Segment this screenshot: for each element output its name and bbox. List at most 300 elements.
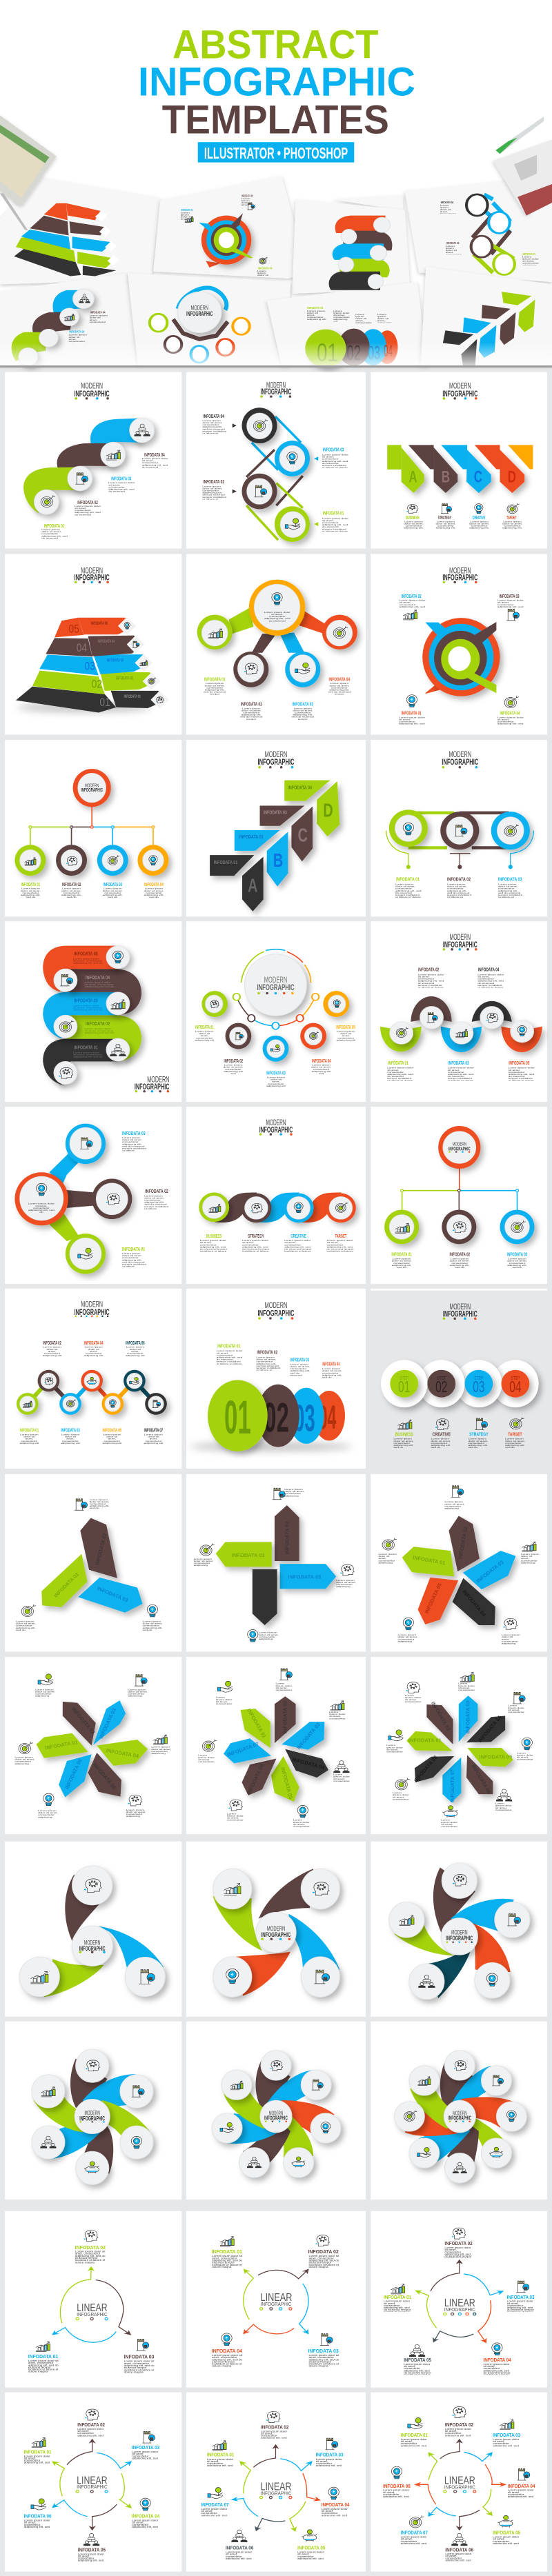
icon notes: Lorem ipsum dolor sit amet, consectetur (198, 1754, 215, 1763)
captions: INFODATA 01 (195, 1025, 214, 1030)
circles with icons (32, 2049, 153, 2184)
captions: Lorem ipsum dolor sit amet, consectetur adipiscing elit, sed do (392, 1258, 412, 1269)
infodata 07 (401, 2515, 428, 2544)
title (138, 22, 415, 142)
rows 7 and 8 (5, 1474, 547, 1834)
chain links (28, 1381, 156, 1404)
arrows: INFODATA 05 (424, 1582, 443, 1615)
infodata 01: INFODATA 01 (401, 2433, 428, 2438)
target note: Lorem ipsum dolor sit amet, consectetur adipiscing (378, 1553, 397, 1564)
mini circle tree: INFOGRAPHIC (186, 311, 213, 317)
arrows and blocks (210, 781, 339, 912)
panel: seven node chain: INFODATA 07 (144, 1427, 163, 1433)
centre label: LINEAR (77, 2302, 108, 2314)
infodata 01 (122, 1247, 147, 1268)
captions with icons (393, 1417, 526, 1451)
infodata 05: INFODATA 05 (493, 2530, 521, 2536)
pill circles with icons (54, 946, 130, 1084)
arrows and blocks: A (248, 875, 257, 896)
block captions: INFODATA 02 (239, 834, 264, 840)
leader lines (386, 831, 533, 869)
bulb note (398, 1618, 418, 1645)
panel: swirl seven (186, 2022, 366, 2200)
layer numbers: 04 (77, 642, 87, 654)
captions: CREATIVE (290, 1234, 306, 1239)
centre label: LINEAR (444, 2297, 475, 2309)
infodata 03: INFODATA 03 (448, 1060, 469, 1066)
mini sheet captions: INFODATA 01 (181, 209, 193, 212)
strategy (435, 504, 457, 530)
infodata 04 (142, 452, 168, 469)
infodata 02 (444, 2228, 473, 2258)
rows 11 and 12 (5, 2211, 547, 2572)
panel: curl steps: INFOGRAPHIC (75, 389, 110, 399)
infodata 06 (24, 2499, 53, 2528)
panel: concentric target (371, 554, 547, 735)
discs (208, 1380, 345, 1451)
captions (195, 1025, 355, 1087)
infodata 01: Lorem ipsum dolor sit amet, consectetur adipiscing elit, sed do eiusmod tempor incididunt ut labore et dolore (217, 1350, 243, 1365)
ribbons: B (442, 467, 450, 486)
icon notes: Lorem ipsum dolor sit amet, consectetur adipiscing (128, 1689, 148, 1697)
arrows: INFODATA 06 (63, 1758, 83, 1790)
panel: linear five (371, 2211, 547, 2388)
infodata 05: INFODATA 05 (78, 2547, 106, 2553)
arrows (402, 1516, 515, 1625)
arrows: INFODATA 02 (70, 1706, 97, 1735)
panel: pyramid: INFODATA 01 (124, 694, 141, 699)
arrows: INFODATA 01 (232, 1552, 265, 1558)
pills (43, 946, 141, 1085)
mini sheet captions: INFODATA 03 (241, 194, 253, 198)
infodata 07: INFODATA 07 (201, 2502, 229, 2508)
infodata 02: INFODATA 02 (445, 2422, 473, 2428)
arrows: INFODATA 01 (52, 1571, 80, 1599)
pill captions (73, 951, 114, 1058)
infodata 01 (401, 2418, 428, 2446)
layer numbers: 01 (99, 696, 110, 709)
panel: four arrows (186, 1474, 366, 1652)
infodata 05: INFODATA 05 (297, 2545, 326, 2551)
panel: diagonal arrows: INFOGRAPHIC (257, 758, 295, 767)
circles with icons: INFOGRAPHIC (262, 1931, 291, 1938)
panel: circle with drops: INFODATA 05 (336, 1025, 355, 1030)
step discs: 03 (473, 1378, 485, 1396)
pill captions: INFODATA 02 (86, 1021, 110, 1027)
infodata 01: INFODATA 01 (384, 2295, 411, 2301)
infodata 07 (201, 2487, 230, 2516)
top node: INFOGRAPHIC (448, 1146, 471, 1152)
bottom captions: INFODATA 03 (61, 1427, 80, 1433)
infodata 02: Lorem ipsum dolor sit amet, consectetur adipiscing elit, sed do eiusmod tempor incididunt ut labore et dolore magna (308, 2255, 339, 2268)
infodata 01: INFODATA 01 (388, 1060, 408, 1066)
infodata 02 (202, 479, 228, 500)
panel: swirl eight (371, 2022, 547, 2200)
arrows: INFODATA 01 (246, 1707, 268, 1739)
centre label: LINEAR (77, 2475, 108, 2487)
panel: linked rings: MODERN (266, 381, 286, 390)
pill captions: INFODATA 04 (86, 975, 110, 980)
diamond tags (118, 617, 169, 709)
circles with icons (213, 1869, 339, 1997)
mini sheet captions: INFODATA 02 (446, 242, 460, 245)
central circle (241, 949, 311, 1016)
layer captions (91, 621, 141, 699)
captions: Lorem ipsum dolor sit amet, consectetur adipiscing elit, sed do (144, 887, 164, 898)
bottom captions (19, 1427, 164, 1445)
captions: Lorem ipsum dolor sit amet, consectetur adipiscing elit, sed do eiusmod tempor incididunt ut labore (326, 1240, 354, 1252)
heading (257, 750, 295, 768)
panel: three arrows (5, 1474, 181, 1652)
infodata 01: Lorem ipsum dolor sit amet, consectetur adipiscing elit, sed do eiusmod tempor incididunt ut labore et dolore magna (28, 2360, 59, 2373)
infodata 01: INFODATA 01 (212, 2249, 242, 2255)
discs: 03 (294, 1397, 315, 1439)
infodata 03 (108, 476, 135, 492)
infodata 03: INFODATA 03 (308, 2348, 339, 2355)
infodata 02: INFODATA 02 (418, 967, 439, 973)
captions with icons: STRATEGY (469, 1431, 489, 1438)
infodata 03: INFODATA 03 (124, 2354, 154, 2360)
infodata 02: INFODATA 02 (308, 2249, 339, 2255)
step discs: 02 (435, 1378, 447, 1396)
mockup sheets (0, 176, 552, 365)
heading (442, 566, 477, 583)
arrows (233, 2445, 319, 2531)
mini circle tree (150, 288, 250, 363)
panel: hub with four nodes (186, 554, 366, 735)
circles with icons: INFOGRAPHIC (79, 2115, 105, 2122)
captions: Lorem ipsum dolor sit amet, consectetur adipiscing elit, sed do eiusmod tempor incididunt ut labore (200, 1240, 227, 1252)
infodata 08: INFODATA 08 (383, 2483, 411, 2489)
captions: Lorem ipsum dolor sit amet, consectetur adipiscing elit sed (311, 1064, 331, 1075)
drops (201, 991, 349, 1062)
badge: illustrator photoshop (198, 142, 354, 163)
arrows (41, 1518, 143, 1613)
infodata 02 (240, 701, 263, 721)
infodata 07: INFODATA 07 (401, 2530, 428, 2536)
infodata 05 (404, 2344, 433, 2375)
mini sheet captions: INFODATA 04 (258, 267, 273, 270)
arrows: INFODATA 02 (430, 1700, 452, 1732)
mini sheet captions (68, 194, 540, 343)
panel: steps on grey (371, 1289, 547, 1451)
captions: TARGET (335, 1234, 346, 1239)
mini discs: 02 (347, 342, 361, 365)
infodata 06 (126, 1340, 145, 1357)
connectors (229, 607, 326, 653)
mini sheet captions: INFODATA 01 (307, 307, 324, 310)
infodata 01 (399, 695, 426, 725)
infodata 01 (28, 2342, 60, 2373)
infodata 01: INFODATA 01 (217, 1343, 241, 1349)
panel: numbered discs (186, 1289, 366, 1469)
tree arc (233, 994, 319, 1029)
captions: Lorem ipsum dolor sit amet, consectetur adipiscing elit, sed do (507, 1258, 527, 1269)
icon notes: Lorem ipsum dolor sit amet, consectetur (517, 1752, 533, 1760)
arrows (216, 1505, 336, 1625)
panel: ribbons abcd (371, 372, 547, 549)
heading: MODERN (449, 750, 471, 759)
panel: pyramid: INFOGRAPHIC (75, 573, 110, 583)
panel: org chart four: INFODATA 04 (144, 882, 164, 888)
swirl bands (44, 1875, 164, 1997)
panel: twisted chain: MODERN (266, 1118, 286, 1127)
rows 1 and 2 (5, 372, 547, 735)
panel: seven node chain: INFOGRAPHIC (75, 1308, 110, 1317)
infodata 04 (484, 2343, 512, 2375)
bottom fade (0, 343, 552, 365)
arrows (416, 2260, 503, 2342)
icon notes: Lorem ipsum dolor sit amet, consectetur (458, 1682, 475, 1691)
circles with icons: MODERN (84, 2110, 100, 2117)
captions (390, 1251, 529, 1269)
captions: INFODATA 02 (62, 882, 81, 888)
infodata 01: INFODATA 01 (122, 1247, 146, 1252)
captions with icons: Lorem ipsum dolor sit amet, consectetur adipiscing elit sed do (393, 1438, 413, 1449)
arrows: INFODATA 04 (461, 1589, 487, 1618)
icon notes: Lorem ipsum dolor sit amet, consectetur (216, 1696, 232, 1705)
captions: INFODATA 02 (450, 1251, 470, 1258)
panel: snake pills (5, 921, 181, 1102)
infodata 02 (445, 2406, 474, 2436)
panel: snake pills: INFOGRAPHIC (135, 1083, 169, 1091)
infodata 03: INFODATA 03 (316, 2452, 343, 2458)
infodata 01: INFODATA 01 (24, 2449, 52, 2455)
infodata 03: INFODATA 03 (323, 447, 344, 453)
centre label: INFOGRAPHIC (444, 2307, 475, 2313)
panel: swirl six (5, 2022, 181, 2200)
infodata 01: INFODATA 01 (323, 510, 344, 516)
panel: numbered discs: INFODATA 02 (257, 1349, 277, 1356)
panel: linear eight (371, 2393, 547, 2572)
panel: diagonal arrows: INFODATA 04 (288, 785, 312, 791)
heading (257, 1301, 295, 1320)
icon notes (14, 1674, 171, 1821)
panel: seven node chain: INFODATA 02 (43, 1340, 61, 1346)
arrows: INFODATA 01 (45, 1739, 78, 1751)
step discs: 04 (509, 1378, 522, 1396)
panel: circle with drops (186, 921, 366, 1102)
arrows (406, 1695, 513, 1802)
arrows: INFODATA 02 (284, 1521, 290, 1554)
infodata 02 (261, 2411, 289, 2439)
panel: wave arches (371, 921, 547, 1102)
mini arrows (443, 292, 535, 365)
panel: wave arches: INFOGRAPHIC (443, 940, 477, 949)
panel: ribbons abcd: CREATIVE (473, 515, 485, 521)
icon notes: Lorem ipsum dolor sit amet, consectetur (293, 1819, 310, 1828)
captions with icons: TARGET (508, 1431, 522, 1438)
arrows (37, 1700, 148, 1798)
infodata 02: INFODATA 02 (203, 479, 224, 485)
centre label (76, 2475, 108, 2493)
arrows: INFODATA 03 (98, 1707, 117, 1740)
arrows: INFODATA 06 (471, 1763, 492, 1795)
panel: hub with four nodes: INFODATA 01 (204, 676, 226, 683)
infodata 04: INFODATA 04 (212, 2348, 242, 2355)
pill captions: INFODATA 03 (74, 998, 98, 1004)
captions with icons: Lorem ipsum dolor sit amet, consectetur adipiscing elit sed do (505, 1438, 525, 1449)
centre label: INFOGRAPHIC (77, 2311, 108, 2317)
infodata 03: INFODATA 03 (122, 1130, 146, 1136)
discs: 01 (224, 1391, 251, 1444)
infodata 01 (41, 523, 68, 539)
infodata 01 (24, 2437, 53, 2464)
swirl bands (33, 2059, 150, 2174)
panel: linked rings: INFOGRAPHIC (261, 388, 291, 396)
icon notes (198, 1669, 352, 1829)
icon notes: Lorem ipsum dolor sit amet, consectetur (441, 1819, 457, 1828)
tree lines (29, 807, 155, 845)
circles with icons: MODERN (267, 1924, 285, 1932)
infodata 04 (477, 967, 504, 988)
central circle: MODERN (264, 976, 287, 985)
bottom captions: INFODATA 05 (102, 1427, 121, 1433)
heading (443, 933, 477, 951)
infodata 04 (202, 413, 228, 434)
heading: MODERN (449, 566, 471, 576)
discs: 02 (264, 1394, 289, 1441)
circles with icons: MODERN (84, 1939, 100, 1946)
circles with icons: MODERN (451, 1930, 468, 1936)
arrows: INFODATA 04 (477, 1714, 503, 1744)
panel: belt rings (371, 740, 547, 916)
panel: swirl five (371, 1842, 547, 2017)
centre label: INFOGRAPHIC (77, 2484, 108, 2490)
bulb note (143, 1604, 166, 1633)
centre label: LINEAR (261, 2291, 292, 2304)
infodata 03 (122, 1130, 147, 1152)
infodata 03 (308, 2334, 339, 2367)
infodata 03: Lorem ipsum dolor sit amet, consectetur adipiscing elit, sed do eiusmod tempor incididunt ut labore (122, 1137, 146, 1151)
captions: INFODATA 04 (312, 1058, 331, 1064)
panel: swirl three (5, 1842, 181, 2017)
infodata 04: INFODATA 04 (203, 413, 224, 419)
infodata 05: INFODATA 05 (404, 2357, 431, 2363)
circles with icons (394, 2051, 526, 2183)
panel: numbered discs: INFODATA 03 (290, 1357, 309, 1363)
target note: Lorem ipsum dolor sit amet, consectetur adipiscing (194, 1558, 213, 1567)
bulb note: Lorem ipsum dolor sit amet, consectetur adipiscing elit, sed do (143, 1620, 162, 1631)
rings with icons (242, 407, 310, 542)
hub (249, 580, 305, 636)
icon notes: Lorem ipsum dolor sit amet, consectetur adipiscing (151, 1746, 171, 1755)
panel: belt rings: INFOGRAPHIC (442, 758, 478, 767)
ribbons (387, 445, 533, 493)
infodata 01: Lorem ipsum dolor sit amet, consectetur adipiscing elit, sed do eiusmod tempor incididunt ut labore (122, 1253, 146, 1267)
pill captions: INFODATA 05 (74, 951, 98, 957)
centre label (260, 2481, 292, 2499)
panel: concentric target: INFODATA 04 (500, 710, 520, 716)
block captions: INFODATA 01 (214, 860, 238, 865)
icon notes: Lorem ipsum dolor sit amet, consectetur (333, 1773, 350, 1782)
infodata 04: INFODATA 04 (478, 967, 500, 973)
panel: seven arrows (186, 1657, 366, 1834)
panel: curl steps: INFODATA 03 (111, 476, 131, 482)
captions: Lorem ipsum dolor sit amet, consectetur adipiscing elit, sed do eiusmod tempor incididunt ut labore (242, 1240, 269, 1252)
top node (73, 769, 111, 807)
heading (260, 381, 291, 398)
infodata 01: Lorem ipsum dolor sit amet, consectetur adipiscing elit, sed do eiusmod tempor incididunt ut labore et dolore magna (212, 2255, 242, 2268)
bulb note (248, 1629, 279, 1643)
mini chain of rings (466, 194, 515, 275)
arrows and blocks: B (273, 849, 283, 871)
arrows: INFODATA 03 (288, 1573, 321, 1580)
infodata 06: INFODATA 06 (445, 2547, 473, 2553)
centre label: INFOGRAPHIC (261, 2491, 291, 2497)
arrows: INFODATA 03 (475, 1559, 505, 1584)
panel: wave arches: MODERN (450, 933, 471, 942)
panel: linked rings (186, 372, 366, 549)
infodata 01 (384, 2284, 413, 2312)
panel: six arrows (5, 1657, 181, 1834)
centre label (260, 2291, 292, 2310)
mini curl steps (12, 289, 94, 365)
panel: metaball tree (5, 1107, 181, 1284)
ribbons: A (408, 467, 417, 486)
captions: INFODATA 02 (224, 1058, 243, 1064)
infodata 05 (297, 2530, 326, 2559)
arrows: INFODATA 06 (246, 1763, 265, 1795)
infodata 06: INFODATA 06 (24, 2513, 51, 2519)
circles with icons: INFOGRAPHIC (264, 2115, 288, 2122)
arches (380, 996, 542, 1052)
heading: MODERN (81, 381, 103, 391)
swirl bands (213, 1869, 339, 1996)
tower note: Lorem ipsum dolor sit amet, consectetur adipiscing elit, sed do (90, 1498, 109, 1509)
infodata 04 (497, 696, 524, 725)
infodata 01 (395, 876, 422, 898)
infodata 03 (316, 2438, 344, 2466)
infodata 03 (507, 2281, 536, 2312)
mini sheet captions: Lorem ipsum dolor sit amet, consectetur adipiscing elit (307, 310, 326, 321)
layer captions: INFODATA 03 (107, 658, 124, 663)
rings (389, 809, 530, 849)
link bands (246, 416, 303, 540)
arrows: INFODATA 04 (292, 1756, 326, 1771)
infodata 04: Lorem ipsum dolor sit amet, consectetur adipiscing elit, sed do eiusmod tempor (328, 683, 351, 695)
panel: ribbons abcd: STRATEGY (438, 515, 451, 521)
mini discs: 03 (368, 343, 380, 363)
captions: Lorem ipsum dolor sit amet, consectetur adipiscing elit, sed do (21, 887, 41, 898)
infodata 04: INFODATA 04 (132, 2513, 160, 2519)
layer captions: INFODATA 05 (91, 621, 108, 626)
panel: hub with four nodes: INFODATA 03 (292, 701, 313, 707)
icon notes (386, 1672, 535, 1829)
arrows: INFODATA 03 (295, 1722, 322, 1751)
arrows: INFODATA 04 (262, 1576, 268, 1609)
icon notes: Lorem ipsum dolor sit amet, consectetur (275, 1682, 292, 1691)
captions: Lorem ipsum dolor sit amet, consectetur adipiscing elit, sed do (61, 887, 81, 898)
infodata 02 (144, 1188, 169, 1210)
panel: diagonal arrows (186, 740, 366, 916)
centre label: LINEAR (444, 2475, 475, 2487)
infodata 02 (75, 2231, 107, 2264)
title: ABSTRACT (172, 22, 378, 67)
heading (75, 1300, 110, 1317)
heading (75, 381, 110, 400)
infodata 04 (212, 2333, 243, 2367)
icon notes: Lorem ipsum dolor sit amet, consectetur adipiscing (14, 1756, 34, 1764)
panel: hub with four nodes: INFODATA 02 (241, 701, 262, 707)
infodata 03 (448, 1060, 474, 1081)
hero banner (0, 0, 552, 368)
captions with icons: CREATIVE (433, 1431, 451, 1438)
icon notes: Lorem ipsum dolor sit amet, consectetur adipiscing (38, 1810, 58, 1818)
panel: metaball tree: INFODATA 02 (145, 1188, 168, 1194)
heading: MODERN (81, 1300, 103, 1309)
panel: curl steps: INFODATA 02 (77, 499, 98, 505)
